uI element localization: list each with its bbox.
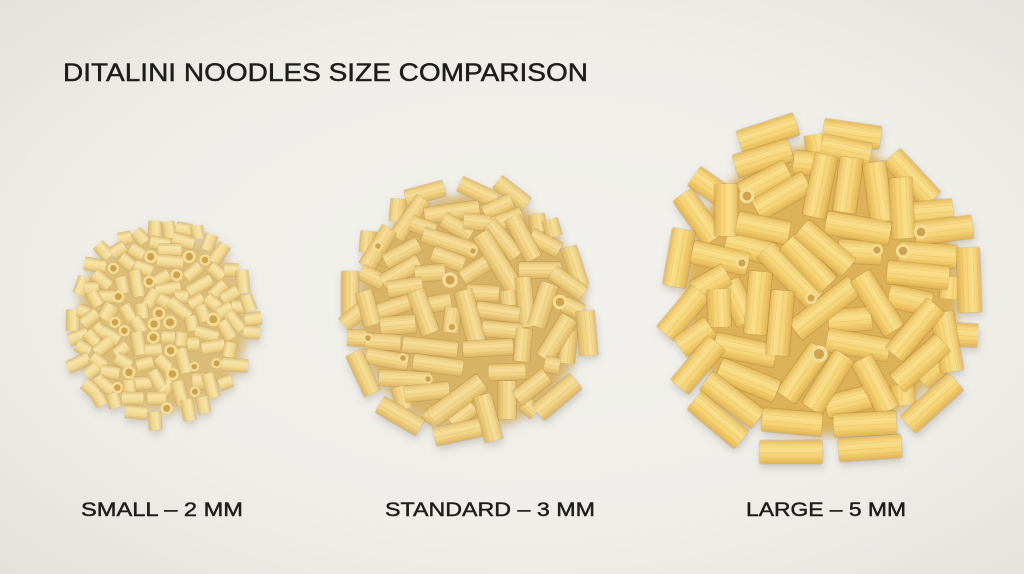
label: standard: STANDARD – 3 MM	[385, 500, 595, 521]
pile: standard 3 mm ditalini	[338, 174, 599, 447]
label: small: SMALL – 2 MM	[81, 500, 243, 521]
title: DITALINI NOODLES SIZE COMPARISON	[63, 59, 588, 87]
pile: large 5 mm ditalini	[655, 112, 983, 464]
pile: small 2 mm ditalini	[65, 220, 263, 431]
label: large: LARGE – 5 MM	[746, 500, 906, 521]
